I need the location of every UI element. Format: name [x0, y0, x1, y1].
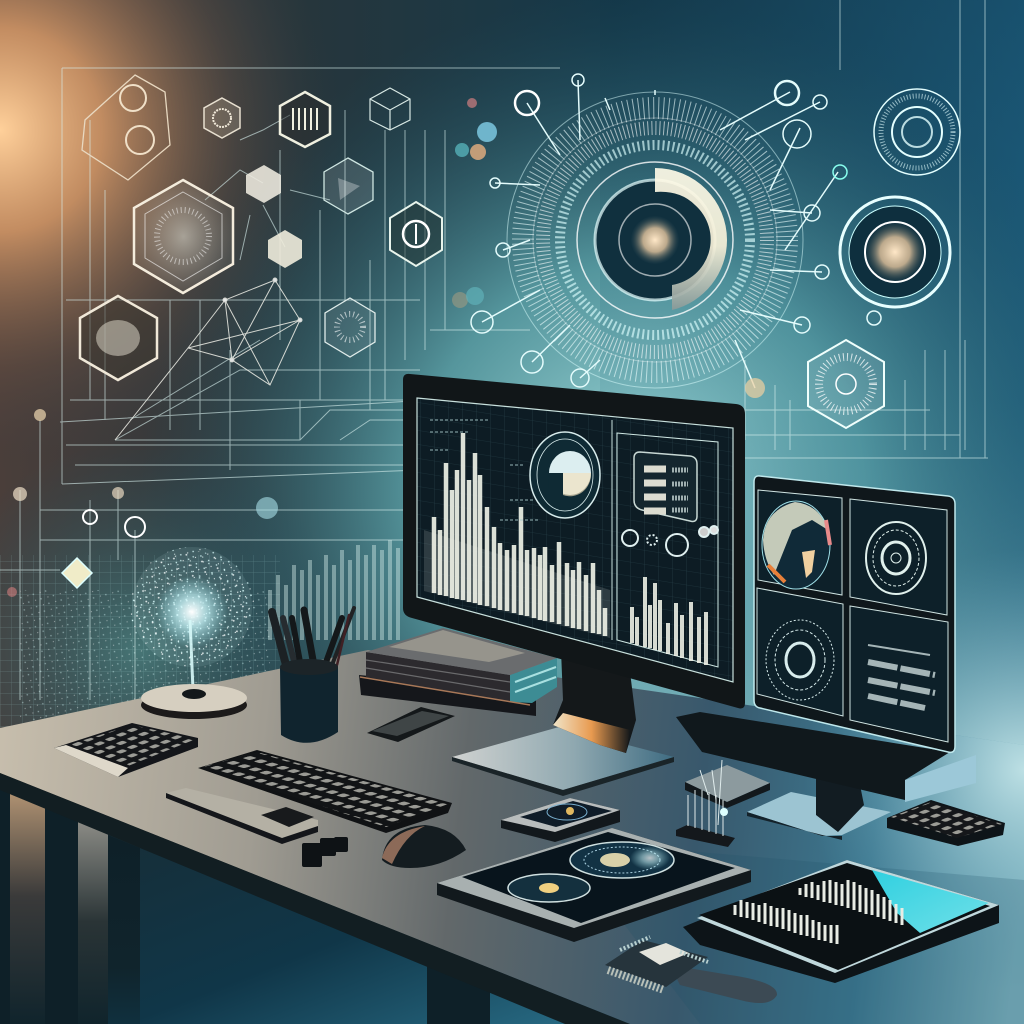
desk legs: [0, 780, 490, 1024]
hexagon: dotted lower: [325, 298, 375, 357]
hexagon network: [80, 75, 442, 440]
background ghost bar chart: [270, 540, 398, 640]
list panel on screen: [634, 452, 697, 521]
hexagon: ring symbol: [390, 202, 442, 266]
orbit dial on screen: [766, 620, 834, 700]
small dial icons on screen: [622, 526, 718, 556]
stack of books: [359, 628, 557, 716]
dial on screen: [866, 522, 926, 594]
wireframe circuit lines: [0, 0, 988, 700]
hexagon: wire cube: [370, 88, 410, 130]
desk surface: [0, 650, 1024, 1024]
stylus device: [166, 788, 318, 844]
hexagon: large crystal: [134, 180, 233, 293]
radial data burst: [507, 92, 803, 388]
main bar chart: [424, 433, 610, 638]
hexagon: white small: [246, 165, 281, 203]
secondary monitor: [676, 476, 976, 840]
usb cube: [302, 837, 348, 867]
large tablet: [437, 828, 751, 942]
wire polyhedron: [115, 278, 302, 440]
main monitor: [403, 374, 745, 796]
chart tablet: [683, 860, 999, 983]
hexagon: bars: [280, 92, 330, 147]
lamp with data tree: [130, 547, 254, 719]
ring gauge with glowing core: [840, 197, 950, 307]
hexagon: small ring: [204, 98, 240, 138]
small tablet: [501, 798, 620, 842]
hexagon: white small lower: [268, 230, 302, 268]
screen text lines: [430, 420, 540, 520]
smartphone: [367, 707, 455, 742]
circuit clip device: [676, 760, 770, 847]
hexagon: top cubes: [82, 75, 170, 180]
pen cup: [272, 608, 354, 743]
list rows on screen: [868, 645, 935, 708]
lower left data grid: [0, 555, 280, 730]
hexagon: dim cube: [324, 158, 373, 214]
hexagon: bottom left chip: [80, 296, 157, 380]
ring gauge top right: [874, 89, 960, 175]
under desk space: [0, 775, 630, 1024]
colored bubbles: [7, 98, 765, 597]
small bar chart: [632, 577, 706, 665]
small keypad right: [887, 800, 1005, 846]
pie gauge on screen: [530, 432, 600, 518]
core glow: [631, 216, 679, 264]
microchip with strap: [605, 937, 777, 1003]
computer mouse: [382, 825, 466, 868]
spoke lines with node circles: [471, 74, 881, 388]
main keyboard: [198, 750, 452, 833]
globe on screen: [762, 501, 830, 589]
hexagon: dotted right: [808, 340, 884, 428]
numeric keypad: [54, 723, 198, 777]
diamond gem: [62, 558, 92, 588]
pie wedge: [655, 168, 727, 310]
